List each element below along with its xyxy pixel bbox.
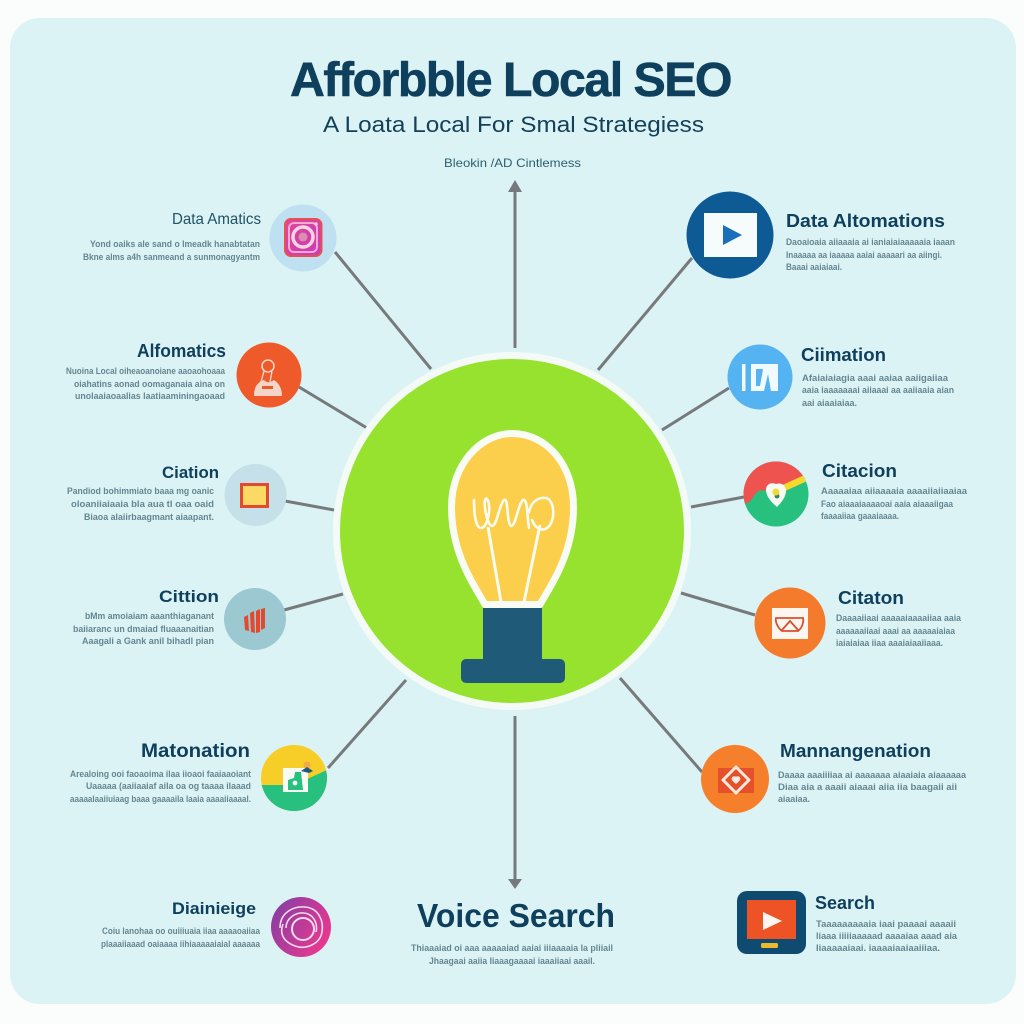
panel: Ciation: Pandiod bohimmiato baaa mg oanic: [67, 486, 214, 497]
panel: Diainieige: [101, 897, 331, 957]
panel: Citacion: Citacion: [822, 461, 897, 481]
panel: Ciimation: aai aiaaiaiaa.: [802, 398, 857, 409]
panel: Voice Search: Jhaagaai aaiia Iiaaagaaaai iaaaiiaai aaail.: [429, 956, 595, 967]
top label: Bleokin /AD Cintlemess: [444, 156, 581, 170]
panel: Data Amatics: [83, 204, 336, 272]
panel: Citaton: Daaaaiiaai aaaaaiaaaaiiaa aaia: [836, 613, 962, 624]
panel: Data Amatics: Bkne alms a4h sanmeand a sunmonagyantm: [83, 252, 260, 263]
panel: Mannangenation: Mannangenation: [780, 741, 931, 761]
panel: Citacion: Fao aiaaaiaaaaoai aaia aiaaaiigaa: [821, 499, 954, 510]
panel: Mannangenation: aiaaiaa.: [778, 794, 810, 805]
panel: Ciimation: Afaiaiaiagia aaai aaiaa aaiigaiiaa: [802, 373, 949, 384]
panel: Data Altomations: Daoaioaia aiiaaaia ai ianiaiaiaaaaaia iaaan: [786, 237, 955, 248]
icon: spiral circle: [271, 897, 331, 957]
panel: Cittion: [73, 587, 286, 650]
panel: Voice Search: Thiaaaiad oi aaa aaaaaiad aaiai iiiaaaaia la pliiail: [411, 943, 613, 954]
panel: Ciation: oloaniiaiaaia bla aua tl oaa oaid: [71, 499, 214, 510]
title: Afforbble Local SEO: [290, 54, 731, 107]
icon: monitor: [737, 891, 806, 954]
panel: Voice Search: [411, 897, 615, 967]
panel: Citaton: aaaaaaiiaai aaai aa aaaaaiaiaa: [836, 626, 956, 637]
panel: Search: Search: [815, 893, 875, 913]
panel: Citaton: [754, 588, 962, 658]
icon: diamond badge: [701, 745, 769, 813]
panel: Alfomatics: [66, 341, 302, 408]
panel: Matonation: Arealoing ooi faoaoima ilaa iioaoi faaiaaoiant: [70, 769, 252, 780]
panel: Data Altomations: Inaaaaa aa iaaaaa aaiai aaaaari aa aiingi.: [786, 250, 942, 261]
panel: Matonation: Matonation: [141, 741, 250, 762]
panel: Alfomatics: Nuoina Local oiheaoanoiane aaoaohoaaa: [66, 366, 226, 377]
icon: video player: [686, 192, 774, 278]
panel: Ciimation: Ciimation: [801, 345, 886, 365]
panel: Search: [737, 891, 958, 954]
panel: Mannangenation: Daaaa aaaiiiiaa ai aaaaaaa aiaaiaia aiaaaaaa: [778, 770, 967, 781]
panel: Search: liaaa iiiiiaaaaad aaaaiaa aaad aia: [816, 931, 958, 942]
panel: Citacion: Aaaaaiaa aiiaaaaia aaaaiiaiiaaiaa: [821, 486, 968, 497]
panel: Cittion: baiiaranc un dmaiad fluaaanaitian: [73, 624, 214, 635]
panel: Citaton: Citaton: [838, 588, 904, 608]
panel: Data Amatics: Yond oaiks ale sand o lmeadk hanabtatan: [90, 239, 260, 250]
arrow: up: [508, 180, 522, 348]
panel: Matonation: Uaaaaa (aaiiaaiaf aila oa og taaaa ilaaad: [86, 781, 251, 792]
panel: Ciimation: [728, 344, 954, 410]
panel: Citacion: [743, 461, 968, 527]
icon: yellow and green badge: [261, 745, 330, 812]
panel: Cittion: bMm amoiaiam aaanthiaganant: [85, 611, 215, 622]
panel: Alfomatics: oiahatins aonad oomaganaia aina on: [74, 379, 225, 390]
icon: rectangle: [224, 464, 286, 526]
panel: Data Altomations: Baaai aaiaiaai.: [786, 262, 842, 273]
panel: Cittion: Aaagali a Gank anil bihadl pian: [82, 636, 214, 647]
connector lines: [284, 252, 755, 772]
panel: Voice Search: Voice Search: [417, 897, 615, 934]
icon: map pin dial: [743, 461, 809, 527]
icon: bar chart: [224, 588, 286, 650]
panel: Diainieige: Diainieige: [172, 899, 256, 918]
central light bulb badge: [336, 356, 688, 706]
panel: Ciation: Biaoa alaiirbaagmant aiaapant.: [84, 512, 214, 523]
panel: Diainieige: plaaaiiaaad oaiaaaa iihiaaaaaiaial aaaaaa: [101, 939, 261, 950]
icon: camera app: [270, 204, 336, 272]
panel: Data Altomations: Data Altomations: [786, 211, 945, 231]
panel: Data Amatics: Data Amatics: [172, 211, 261, 228]
panel: Diainieige: Coiu lanohaa oo ouiiiuaia iiaa aaaaoaiiaa: [102, 926, 261, 937]
panel: Matonation: aaaaalaaiiuiaag baaa gaaaaila laaia aaaaiiaaaal.: [70, 794, 251, 805]
subtitle: A Loata Local For Smal Strategiess: [323, 112, 704, 137]
panel: Ciation: [67, 463, 286, 526]
icon: picture card: [754, 588, 826, 658]
panel: Ciimation: aaia iaaaaaaai aiiaaai aa aaiiaaia aian: [802, 385, 954, 396]
panel: Mannangenation: Diaa aia a aaaii aiaaai aiia iia baagaii aii: [778, 782, 957, 793]
panel: Search: Iiaaaaaiaai. iaaaaiaaiaaiiiaa.: [816, 943, 940, 954]
panel: Mannangenation: [701, 741, 967, 813]
panel: Search: Taaaaaaaaaia iaai paaaai aaaaii: [816, 919, 956, 930]
arrow: down: [508, 716, 522, 889]
panel: Alfomatics: Alfomatics: [137, 341, 226, 361]
icon: person: [236, 342, 302, 408]
panel: Citacion: faaaaiiaa gaaaiaaaa.: [821, 511, 899, 522]
panel: Alfomatics: unolaaiaoaalias laatiaaminingaoaad: [75, 391, 225, 402]
icon: blue glyph: [728, 344, 792, 410]
panel: Ciation: Ciation: [162, 463, 219, 482]
panel: Matonation: [70, 741, 330, 812]
panel: Cittion: Cittion: [159, 587, 219, 606]
panel: Data Altomations: [686, 192, 955, 278]
panel: Citaton: iaiaiaiaa iiaa aaaiaiaaiiaaa.: [836, 638, 943, 649]
